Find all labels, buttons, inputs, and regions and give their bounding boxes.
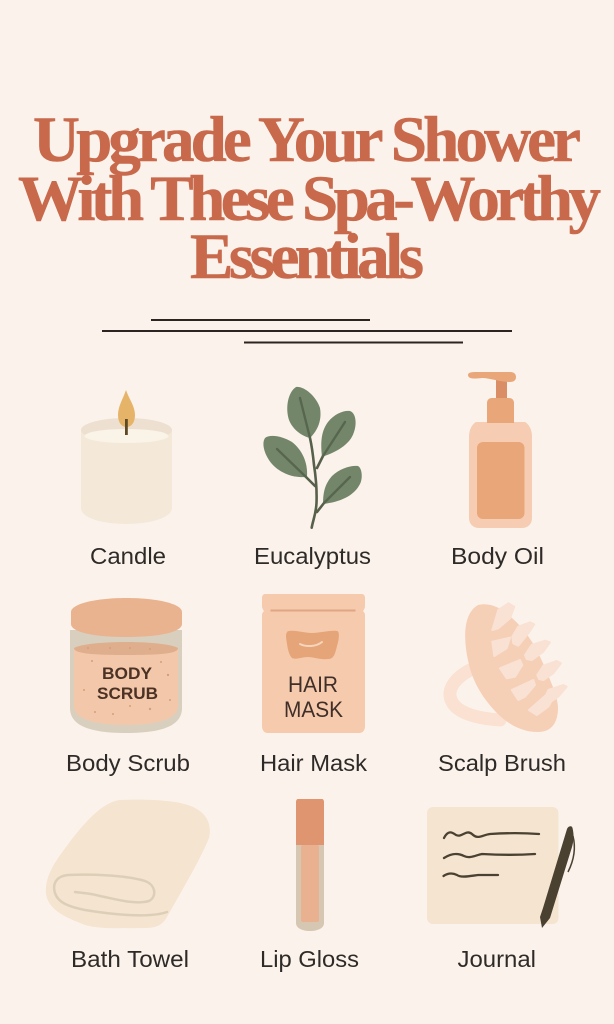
label: body scrub: Body Scrub [66,750,190,776]
icon: hair mask packet: MASK [284,697,343,722]
label: eucalyptus: Eucalyptus [254,543,371,569]
icon: body scrub jar: SCRUB [97,684,158,703]
icon: hair mask packet [262,594,365,733]
icon: journal with pen [427,807,574,928]
title [18,104,601,293]
icon: eucalyptus [263,387,362,528]
icon: body scrub jar: BODY [102,664,153,683]
icon: body oil bottle [468,372,532,528]
icon: lip gloss [296,799,324,931]
icon: candle [81,390,172,524]
title: Essentials [190,221,424,293]
label: journal: Journal [458,946,536,972]
label: candle: Candle [90,543,166,569]
label: body oil: Body Oil [451,543,544,569]
icon: scalp brush [450,603,567,732]
icon: bath towel [46,800,210,928]
icon: body scrub jar [70,598,182,733]
title: With These Spa-Worthy [18,163,601,235]
label: bath towel: Bath Towel [71,946,189,972]
title: Upgrade Your Shower [33,104,581,176]
icon: hair mask packet: HAIR [288,672,338,697]
label: lip gloss: Lip Gloss [260,946,359,972]
label: scalp brush: Scalp Brush [438,750,566,776]
label: hair mask: Hair Mask [260,750,368,776]
